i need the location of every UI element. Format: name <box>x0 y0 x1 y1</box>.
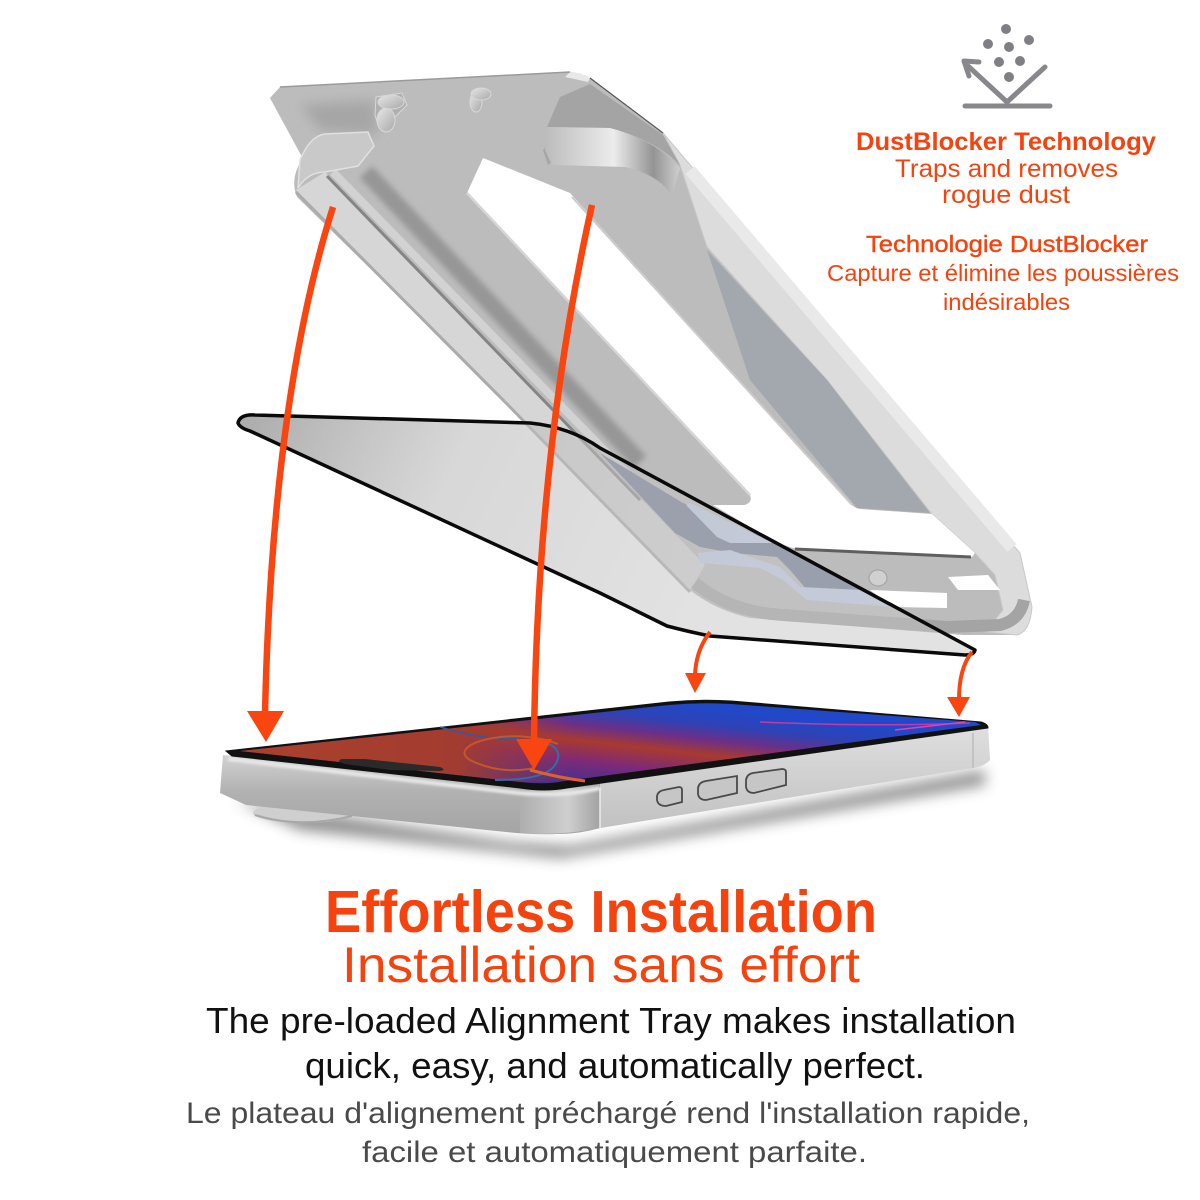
phone side <box>557 725 990 834</box>
callout: DustBlocker French: Technologie DustBlocker <box>866 231 1148 257</box>
dynamic island <box>339 759 444 771</box>
body text French: facile et automatiquement parfaite. <box>362 1136 867 1169</box>
arrow: far left <box>247 207 333 742</box>
blue lift tab <box>600 453 867 590</box>
right arm panel <box>707 250 930 513</box>
tray silhouette <box>270 72 1032 635</box>
arrow: small right <box>947 652 972 717</box>
body text English: quick, easy, and automatically perfect. <box>305 1045 925 1086</box>
heading <box>325 879 877 993</box>
right outer rail <box>663 133 1032 635</box>
body text English: The pre-loaded Alignment Tray makes installation <box>206 1000 1016 1041</box>
body text French <box>186 1097 1030 1169</box>
callout: DustBlocker French: indésirables <box>943 289 1070 315</box>
callout: DustBlocker French <box>827 231 1179 315</box>
heading: Installation sans effort <box>342 937 860 993</box>
callout: DustBlocker French: Capture et élimine les poussières <box>827 260 1179 286</box>
alignment tray <box>270 72 1032 635</box>
phone screen wallpaper <box>240 703 981 783</box>
callout: DustBlocker English <box>856 128 1156 209</box>
wallpaper swirl <box>440 722 970 781</box>
right recess <box>547 84 680 165</box>
callout: DustBlocker English: Traps and removes <box>895 155 1118 183</box>
phone <box>220 700 990 834</box>
phone screen bezel <box>226 700 988 790</box>
heading: Effortless Installation <box>325 879 877 945</box>
side buttons <box>657 769 786 806</box>
alignment pegs <box>375 88 491 132</box>
arrow: small bottom <box>685 632 710 693</box>
window cut-out <box>467 158 975 557</box>
camera bump <box>253 803 353 823</box>
left rail <box>296 172 705 590</box>
tray inner rim <box>695 583 1024 627</box>
callout: DustBlocker English: DustBlocker Technology <box>856 128 1156 156</box>
right loop <box>545 127 680 196</box>
top-plate shading <box>300 100 378 135</box>
left loop <box>298 132 374 188</box>
phone front <box>220 755 600 834</box>
cross bar <box>793 548 972 593</box>
body text French: Le plateau d'alignement préchargé rend l'installation rapide, <box>186 1097 1030 1130</box>
glass screen protector <box>238 415 975 655</box>
shadow under phone <box>235 770 985 858</box>
icon: dust blocker <box>964 24 1050 106</box>
body text English <box>206 1000 1016 1086</box>
arrow: centre <box>516 205 592 770</box>
callout: DustBlocker English: rogue dust <box>942 181 1070 209</box>
